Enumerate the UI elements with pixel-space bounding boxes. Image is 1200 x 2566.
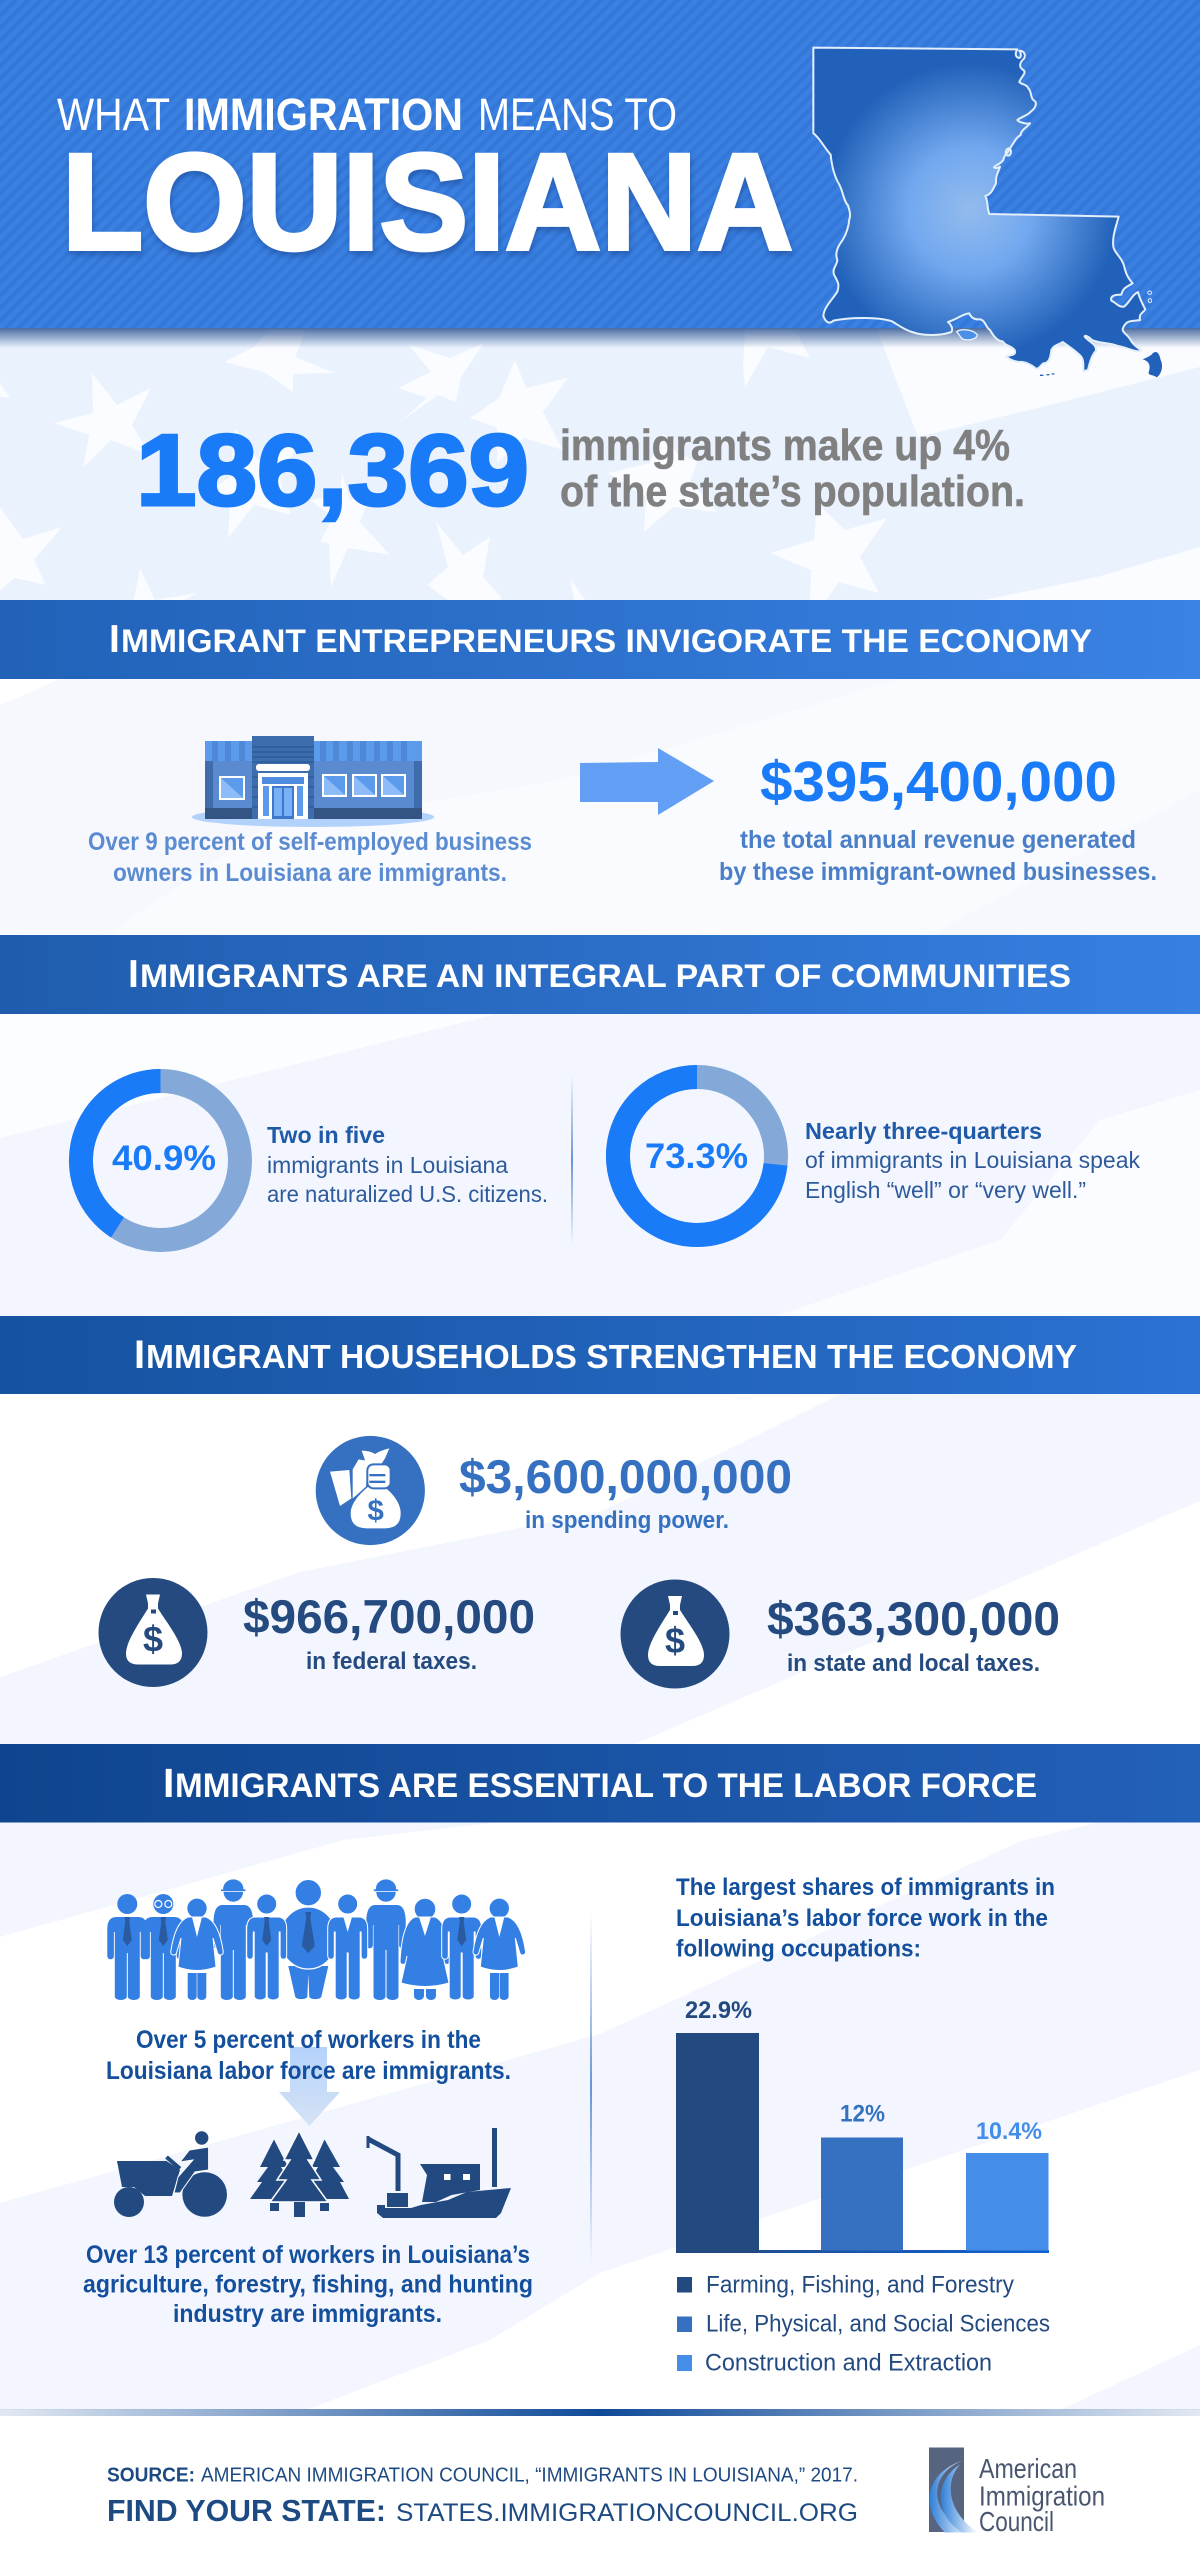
text: agriculture share: agriculture, forestry, fishing, and hunting (83, 2270, 533, 2298)
icon: storefront (192, 736, 434, 827)
icon: Louisiana state map (813, 48, 1162, 377)
statistic: state and local taxes: $363,300,000 (767, 1592, 1060, 1645)
text: labor force share: Over 5 percent of workers in the (136, 2026, 481, 2054)
donut chart: English proficiency: 73.3% (645, 1137, 748, 1176)
big statistic: 186,369 (136, 415, 529, 527)
section heading: households: MMIGRANT HOUSEHOLDS STRENGTHEN THE ECONOMY (146, 1338, 1077, 1375)
donut chart: naturalized citizens (81, 1081, 240, 1240)
section heading: labor force (0, 1744, 1200, 1822)
section heading: communities: MMIGRANTS ARE AN INTEGRAL PART OF COMMUNITIES (140, 958, 1071, 994)
text: occupations chart title: following occupations: (676, 1936, 921, 1962)
statistic: federal taxes: in federal taxes. (306, 1648, 477, 1675)
bar chart: occupations: 10.4% (976, 2118, 1042, 2145)
icon: money bag federal (98, 1578, 208, 1687)
logo: American Immigration Council: Immigration (979, 2480, 1105, 2512)
section background: households (0, 1394, 1200, 1744)
source text: FIND YOUR STATE: (107, 2493, 386, 2528)
icon: money bag state: $ (665, 1620, 685, 1661)
statistic: spending power: $3,600,000,000 (459, 1450, 792, 1503)
legend (677, 2272, 1050, 2376)
icon: money bag state (620, 1580, 730, 1688)
logo: American Immigration Council: Council (979, 2506, 1054, 2537)
text: nearly three-quarters: Nearly three-quarters (805, 1118, 1042, 1144)
donut chart: English proficiency (618, 1077, 776, 1235)
text: agriculture share: Over 13 percent of workers in Louisiana’s (86, 2241, 530, 2269)
icon: pine trees (250, 2130, 349, 2217)
statistic: annual revenue: $395,400,000 (760, 750, 1117, 814)
icon: money bag federal: $ (143, 1618, 163, 1660)
text: labor force share (106, 2026, 511, 2085)
text: occupations chart title: The largest shares of immigrants in (676, 1874, 1055, 1901)
statistic: state and local taxes (767, 1592, 1060, 1677)
legend: Life, Physical, and Social Sciences (706, 2310, 1050, 2338)
statistic: federal taxes: $966,700,000 (243, 1590, 535, 1643)
statistic: annual revenue: by these immigrant-owned businesses. (719, 858, 1157, 886)
section heading: labor force: I (163, 1760, 174, 1806)
arrow: right (580, 748, 714, 815)
section heading: entrepreneurs (0, 600, 1200, 679)
text: two in five: are naturalized U.S. citizens. (267, 1181, 548, 1207)
logo: American Immigration Council: American (979, 2453, 1077, 2484)
section background: communities (0, 1014, 1200, 1318)
icon: fishing boat (366, 2128, 511, 2218)
text: occupations chart title: Louisiana’s labor force work in the (676, 1905, 1048, 1932)
section heading: communities: I (128, 953, 139, 996)
text: self-employed owners: Over 9 percent of self-employed business (88, 828, 532, 856)
panel: header banner (0, 0, 1200, 348)
text: nearly three-quarters (805, 1118, 1140, 1203)
statistic: spending power: in spending power. (525, 1507, 729, 1534)
icon: hand holding money bag (316, 1436, 425, 1545)
icon: group of workers (107, 1879, 526, 2000)
legend: Construction and Extraction (705, 2350, 992, 2376)
title: IMMIGRATION (184, 89, 463, 140)
statistic: spending power (459, 1450, 792, 1534)
statistic: annual revenue (719, 750, 1157, 886)
big statistic (136, 415, 1025, 527)
donut chart: naturalized citizens: 40.9% (112, 1139, 216, 1178)
big statistic: immigrants make up 4% (560, 421, 1010, 470)
text: two in five (267, 1122, 548, 1207)
section heading: communities (0, 935, 1200, 1014)
big statistic: of the state’s population. (560, 467, 1025, 516)
section heading: entrepreneurs: MMIGRANT ENTREPRENEURS INVIGORATE THE ECONOMY (121, 623, 1092, 659)
section background: entrepreneurs (0, 679, 1200, 935)
logo: American Immigration Council (929, 2448, 1105, 2537)
statistic: annual revenue: the total annual revenue generated (740, 826, 1136, 854)
text: self-employed owners: owners in Louisiana are immigrants. (113, 859, 507, 887)
text: agriculture share (83, 2241, 533, 2328)
section heading: households (0, 1316, 1200, 1394)
text: nearly three-quarters: of immigrants in Louisiana speak (805, 1147, 1140, 1173)
title: MEANS TO (478, 89, 677, 140)
text: nearly three-quarters: English “well” or “very well.” (805, 1177, 1086, 1203)
section heading: labor force: MMIGRANTS ARE ESSENTIAL TO THE LABOR FORCE (175, 1767, 1037, 1805)
section background: labor force (0, 1822, 1200, 2410)
arrow: down (279, 2047, 340, 2126)
title: WHAT (57, 89, 170, 140)
panel: star background (0, 328, 1200, 600)
icon: hand holding money bag: $ (368, 1495, 384, 1528)
bar chart: occupations: 12% (840, 2100, 885, 2128)
bar chart: occupations (676, 1997, 1049, 2253)
icon: tractor (114, 2131, 227, 2217)
text: labor force share: Louisiana labor force are immigrants. (106, 2057, 511, 2085)
source text: STATES.IMMIGRATIONCOUNCIL.ORG (396, 2499, 858, 2527)
statistic: federal taxes (243, 1590, 535, 1675)
legend: Farming, Fishing, and Forestry (706, 2272, 1014, 2298)
text: two in five: immigrants in Louisiana (267, 1152, 508, 1178)
title: LOUISIANA (62, 126, 793, 279)
text: two in five: Two in five (267, 1122, 385, 1148)
source text: SOURCE: (107, 2464, 195, 2486)
section heading: households: I (134, 1333, 145, 1377)
section heading: entrepreneurs: I (109, 618, 120, 661)
source text: AMERICAN IMMIGRATION COUNCIL, “IMMIGRANTS IN LOUISIANA,” 2017. (201, 2464, 858, 2486)
bar chart: occupations: 22.9% (685, 1997, 752, 2024)
source text (107, 2464, 858, 2528)
text: self-employed owners (88, 828, 532, 887)
text: occupations chart title (676, 1874, 1055, 1962)
text: agriculture share: industry are immigrants. (173, 2300, 442, 2328)
statistic: state and local taxes: in state and local taxes. (787, 1650, 1040, 1677)
